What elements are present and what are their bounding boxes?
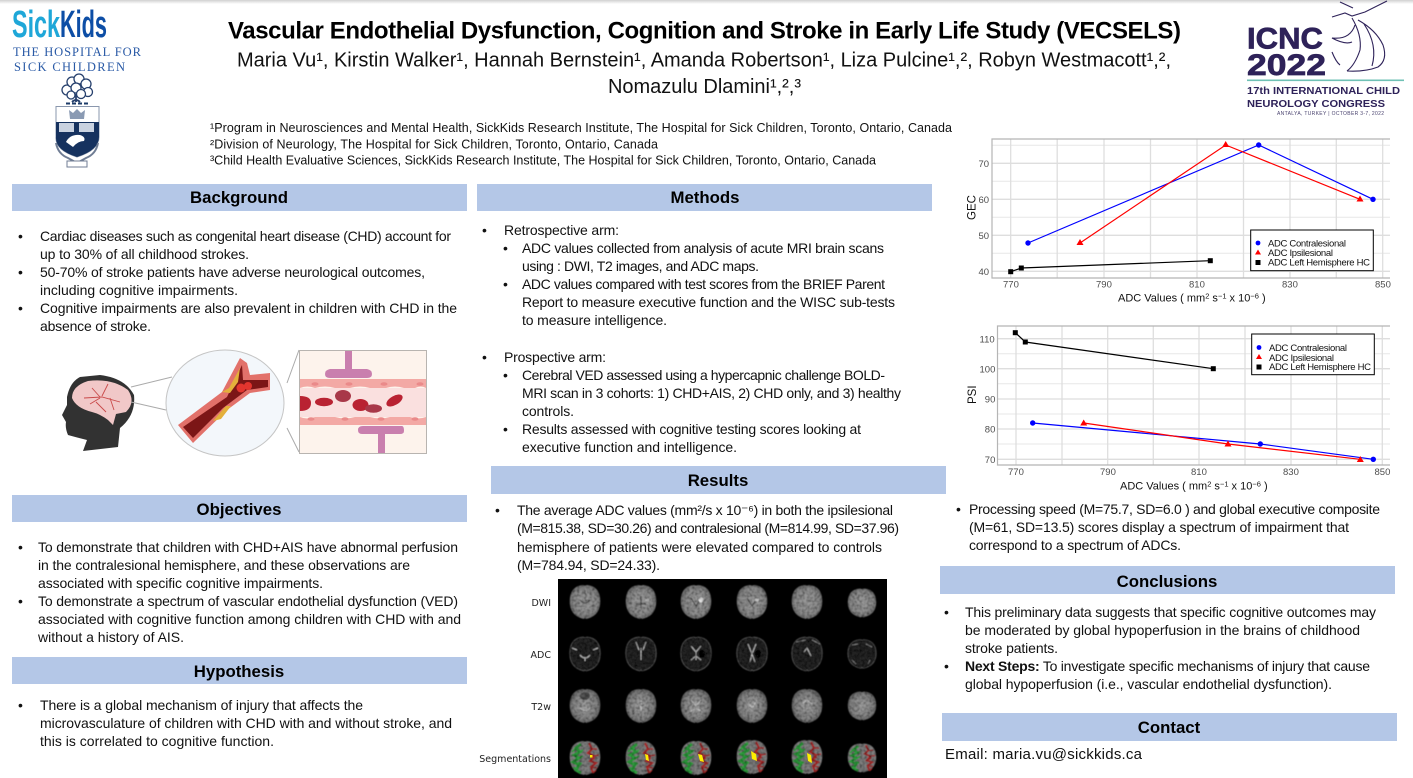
results commentary: (M=61, SD=13.5) scores display a spectrum of impairment that <box>969 519 1349 535</box>
heading: results <box>491 466 946 494</box>
prospective arm: executive function and intelligence. <box>522 439 737 455</box>
objectives bullets: To demonstrate a spectrum of vascular endothelial dysfunction (VED) <box>38 593 458 609</box>
logo: ICNC 2022 <box>1247 1 1404 117</box>
authors: Maria Vu¹, Kirstin Walker¹, Hannah Bernstein¹, Amanda Robertson¹, Liza Pulcine¹,², Robyn Westmacott¹,², <box>237 50 1171 72</box>
panel: hypothesis <box>12 657 467 749</box>
x-axis labels <box>1008 467 1390 478</box>
x-axis labels: 790 <box>1100 467 1116 478</box>
heading: background <box>12 184 467 211</box>
background bullets: Cognitive impairments are also prevalent in children with CHD in the <box>40 300 457 316</box>
logo: ICNC 2022: ICNC <box>1247 22 1323 56</box>
prospective arm: • <box>503 421 508 437</box>
prospective arm: MRI scan in 3 cohorts: 1) CHD+AIS, 2) CHD only, and 3) healthy <box>522 385 901 401</box>
background bullets: absence of stroke. <box>40 318 151 334</box>
logo: ICNC 2022: ANTALYA, TURKEY | OCTOBER 3-7, 2022 <box>1277 111 1384 117</box>
y-axis labels: 70 <box>978 159 989 170</box>
objectives bullets: without a history of AIS. <box>37 629 184 645</box>
legend: ADC Left Hemisphere HC <box>1268 258 1370 268</box>
prospective arm: Results assessed with cognitive testing scores looking at <box>522 421 861 437</box>
series: contralesional <box>1030 420 1376 462</box>
objectives bullets: associated with cognitive function among children with CHD with and <box>38 611 461 627</box>
affiliations: ³Child Health Evaluative Sciences, SickKids Research Institute, The Hospital for Sick Children, Toronto, Ontario, Canada <box>210 154 876 168</box>
background bullets: • <box>18 300 23 316</box>
y-axis labels: 90 <box>985 394 995 406</box>
heading: objectives: Objectives <box>197 500 281 519</box>
retrospective arm: • <box>482 222 487 238</box>
background bullets: including cognitive impairments. <box>40 282 238 298</box>
chart: GEC vs ADC values <box>966 139 1391 304</box>
panel: background <box>12 184 467 334</box>
panel: conclusions <box>940 566 1395 692</box>
y-axis labels: 70 <box>985 455 995 466</box>
heading: results: Results <box>688 471 748 490</box>
x-axis title: 2 <box>1205 292 1209 300</box>
connector lines <box>131 350 299 452</box>
series: left hemisphere HC <box>1008 258 1213 274</box>
x-axis title: −6 <box>1250 292 1259 300</box>
x-axis title: ) <box>1261 480 1268 492</box>
conclusions bullets: This preliminary data suggests that specific cognitive outcomes may <box>965 604 1376 620</box>
MRI row labels: DWI <box>531 598 551 609</box>
x-axis title: ADC Values ( mm <box>1118 292 1205 304</box>
icon: artery with clot <box>166 350 284 456</box>
x-axis title: −1 <box>1218 292 1226 300</box>
legend: ADC Ipsilesional <box>1269 353 1334 364</box>
affiliations: ²Division of Neurology, The Hospital for Sick Children, Toronto, Ontario, Canada <box>210 138 658 152</box>
chart: PSI vs ADC values <box>967 326 1390 492</box>
heading: conclusions: Conclusions <box>1117 572 1217 591</box>
contact email: Email: maria.vu@sickkids.ca <box>945 746 1143 763</box>
legend: ADC Contralesional <box>1269 343 1347 354</box>
y-axis labels <box>978 159 989 278</box>
prospective arm: • <box>503 367 508 383</box>
background bullets: up to 30% of all childhood strokes. <box>40 246 249 262</box>
series: left hemisphere HC <box>1013 330 1216 371</box>
conclusions bullets: Next Steps: To investigate specific mechanisms of injury that cause <box>965 658 1370 674</box>
figure: MRI scan grid <box>479 579 887 778</box>
retrospective arm: to measure intelligence. <box>522 312 667 328</box>
legend <box>1252 334 1374 375</box>
authors <box>237 50 1171 98</box>
x-axis labels: 770 <box>1003 280 1019 290</box>
x-axis labels <box>1003 280 1391 290</box>
results commentary: Processing speed (M=75.7, SD=6.0 ) and global executive composite <box>969 501 1380 517</box>
affiliations <box>210 121 952 168</box>
prospective arm: Prospective arm: <box>504 349 606 365</box>
prospective arm: • <box>482 349 487 365</box>
objectives bullets: • <box>18 539 23 555</box>
authors: Nomazulu Dlamini¹,²,³ <box>608 76 801 98</box>
logo: ICNC 2022: 2022 <box>1247 49 1326 82</box>
background bullets: • <box>18 228 23 244</box>
icon: child head silhouette with brain <box>62 375 134 451</box>
heading: objectives <box>12 495 467 522</box>
results text: hemisphere of patients were elevated compared to controls <box>517 539 882 555</box>
icon: university crest <box>56 74 99 167</box>
x-axis title: ) <box>1259 292 1266 304</box>
title: Vascular Endothelial Dysfunction, Cognition and Stroke in Early Life Study (VECSELS) <box>228 18 1181 44</box>
background bullets: Cardiac diseases such as congenital heart disease (CHD) account for <box>40 228 451 244</box>
results commentary: correspond to a spectrum of ADCs. <box>969 537 1181 553</box>
x-axis title: ADC Values ( mm <box>1120 480 1207 492</box>
legend: ADC Left Hemisphere HC <box>1269 362 1371 373</box>
logo: ICNC 2022: NEUROLOGY CONGRESS <box>1247 98 1385 110</box>
x-axis title: s <box>1211 480 1220 492</box>
logo: SickKids: Sick <box>12 4 61 46</box>
heading: contact: Contact <box>1138 718 1201 737</box>
y-axis title: GEC <box>966 195 978 220</box>
affiliations: ¹Program in Neurosciences and Mental Health, SickKids Research Institute, The Hospital for Sick Children, Toronto, Ontario, Canada <box>210 121 952 135</box>
x-axis title: −6 <box>1252 480 1261 488</box>
y-axis labels: 40 <box>978 267 989 278</box>
x-axis title: s <box>1209 292 1218 304</box>
conclusions bullets: be moderated by global hypoperfusion in the brains of childhood <box>965 622 1360 638</box>
logo: SickKids <box>12 4 142 74</box>
objectives bullets: To demonstrate that children with CHD+AIS have abnormal perfusion <box>38 539 458 555</box>
results commentary <box>956 501 1380 553</box>
logo: SickKids: THE HOSPITAL FOR <box>13 45 142 59</box>
panel: contact <box>942 713 1397 763</box>
x-axis labels: 810 <box>1191 467 1207 478</box>
x-axis title: x 10 <box>1226 292 1250 304</box>
x-axis title: −1 <box>1220 480 1228 488</box>
hypothesis text: microvasculature of children with CHD with and without stroke, and <box>40 715 452 731</box>
panel: blood-brain barrier diagram <box>300 350 426 454</box>
logo: ICNC 2022: 17th INTERNATIONAL CHILD <box>1247 85 1400 97</box>
y-axis labels: 100 <box>980 364 995 376</box>
y-axis labels <box>980 334 995 466</box>
heading: methods: Methods <box>670 188 740 207</box>
y-axis labels: 50 <box>978 231 989 242</box>
retrospective arm: using : DWI, T2 images, and ADC maps. <box>522 258 759 274</box>
hypothesis text: • <box>18 697 23 713</box>
retrospective arm: ADC values compared with test scores from the BRIEF Parent <box>522 276 885 292</box>
panel: methods <box>477 184 932 455</box>
background bullets: 50-70% of stroke patients have adverse neurological outcomes, <box>40 264 425 280</box>
prospective arm: controls. <box>522 403 574 419</box>
x-axis labels: 790 <box>1096 280 1112 290</box>
retrospective arm: • <box>503 240 508 256</box>
prospective arm <box>482 349 901 455</box>
x-axis labels: 850 <box>1375 280 1391 290</box>
retrospective arm: Report to measure executive function and the WISC sub-tests <box>522 294 895 310</box>
x-axis labels: 830 <box>1282 280 1298 290</box>
hypothesis text <box>18 697 452 749</box>
legend: ADC Ipsilesional <box>1268 248 1333 259</box>
objectives bullets <box>18 539 461 645</box>
y-axis labels: 110 <box>980 334 995 346</box>
x-axis labels: 770 <box>1008 467 1024 478</box>
heading: background: Background <box>190 188 288 207</box>
objectives bullets: • <box>18 593 23 609</box>
background bullets: • <box>18 264 23 280</box>
series: contralesional <box>1025 142 1376 246</box>
results text: • <box>495 502 500 518</box>
heading: hypothesis: Hypothesis <box>194 662 284 681</box>
MRI row labels: T2w <box>530 702 551 713</box>
series: ipsilesional <box>1076 141 1364 245</box>
lesion segmentations <box>590 751 812 763</box>
x-axis title: x 10 <box>1228 480 1252 492</box>
retrospective arm <box>482 222 895 328</box>
series: ipsilesional <box>1080 420 1364 462</box>
conclusions bullets: global hypoperfusion (i.e., vascular endothelial dysfunction). <box>965 676 1332 692</box>
results text <box>495 502 899 573</box>
logo: SickKids: SICK CHILDREN <box>14 60 125 74</box>
objectives bullets: in the contralesional hemisphere, and these observations are <box>38 557 410 573</box>
panel: objectives <box>12 495 467 645</box>
conclusions bullets: • <box>944 658 949 674</box>
MRI brain slices <box>570 585 876 775</box>
conclusions bullets: stroke patients. <box>965 640 1058 656</box>
conclusions bullets: • <box>944 604 949 620</box>
x-axis labels: 810 <box>1189 280 1205 290</box>
y-axis labels: 80 <box>985 424 995 436</box>
x-axis labels: 830 <box>1283 467 1299 478</box>
legend: ADC Contralesional <box>1268 238 1346 250</box>
hypothesis text: this is correlated to cognitive function. <box>40 733 274 749</box>
logo: SickKids: Kids <box>60 4 107 46</box>
retrospective arm: ADC values collected from analysis of acute MRI brain scans <box>522 240 884 256</box>
heading: hypothesis <box>12 657 467 684</box>
MRI row labels <box>479 598 551 765</box>
illustration: stroke in brain vasculature <box>62 350 426 456</box>
prospective arm: Cerebral VED assessed using a hypercapnic challenge BOLD- <box>522 367 885 383</box>
y-axis labels: 60 <box>978 195 989 206</box>
heading: contact <box>942 713 1397 741</box>
MRI row labels: ADC <box>531 650 551 661</box>
hypothesis text: There is a global mechanism of injury that affects the <box>40 697 363 713</box>
x-axis title: 2 <box>1207 480 1211 488</box>
retrospective arm: Retrospective arm: <box>504 222 619 238</box>
MRI row labels: Segmentations <box>479 754 551 765</box>
results commentary: • <box>956 501 961 517</box>
panel: results <box>491 466 946 573</box>
results text: (M=784.94, SD=24.33). <box>517 557 660 573</box>
heading: methods <box>477 184 932 211</box>
heading: conclusions <box>940 566 1395 594</box>
conclusions bullets <box>944 604 1376 692</box>
legend <box>1251 230 1373 271</box>
x-axis labels: 850 <box>1374 467 1390 478</box>
y-axis title: PSI <box>967 385 979 404</box>
results text: The average ADC values (mm²/s x 10⁻⁶) in both the ipsilesional <box>517 502 893 518</box>
results text: (M=815.38, SD=30.26) and contralesional (M=814.99, SD=37.96) <box>517 520 899 536</box>
objectives bullets: associated with specific cognitive impairments. <box>38 575 323 591</box>
retrospective arm: • <box>503 276 508 292</box>
background bullets <box>18 228 457 334</box>
